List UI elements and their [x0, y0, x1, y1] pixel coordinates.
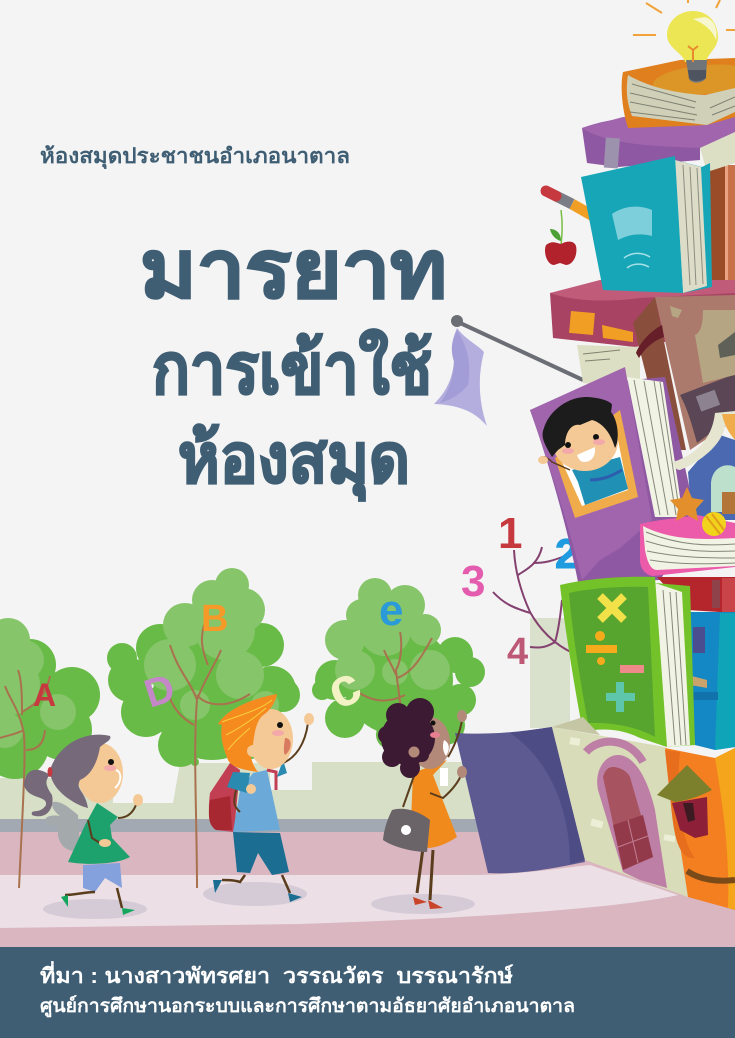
orange book with pages — [622, 58, 735, 128]
subtitle: ห้องสมุดประชาชนอำเภอนาตาล — [40, 144, 350, 170]
number branches: 1 — [498, 509, 522, 558]
number branches: 3 — [461, 557, 485, 606]
red backpack — [209, 763, 240, 832]
girl with curly hair and bag — [371, 698, 475, 914]
teal book — [581, 156, 712, 293]
stacked books tower — [530, 0, 735, 910]
pink book with star and ball — [640, 487, 735, 576]
blue house book — [673, 411, 735, 520]
background buildings — [0, 618, 570, 825]
plus sign — [606, 682, 635, 712]
main title: การเข้าใช้ — [152, 328, 432, 408]
number branches: 2 — [555, 530, 578, 577]
brown side book — [705, 165, 735, 295]
tree: right with letters e and c: c — [318, 654, 370, 721]
number branches: 4 — [507, 631, 528, 673]
footer band — [0, 947, 735, 1038]
purple book with boy — [530, 367, 700, 582]
minus sign — [620, 665, 644, 673]
tree: middle with letters B and D — [107, 568, 300, 888]
orange house wing — [657, 748, 735, 910]
source line: ที่มา : นางสาวพัทรศยา วรรณวัตร บรรณารักษ์ — [40, 960, 514, 988]
bunny backpack — [45, 802, 80, 851]
boy in frame — [538, 397, 628, 505]
multiply sign — [600, 596, 624, 620]
maroon book — [550, 280, 735, 390]
green math book — [560, 577, 695, 747]
red book — [657, 577, 735, 613]
road and pavement — [0, 819, 735, 948]
tree: right with letters e and c — [312, 578, 485, 749]
purple book — [582, 113, 735, 172]
main title — [140, 225, 447, 501]
dark box — [680, 375, 735, 443]
icon: light bulb — [633, 0, 735, 83]
divide sign — [586, 631, 617, 665]
flag — [434, 315, 583, 426]
cream house — [552, 717, 688, 897]
boy picture frame — [555, 410, 638, 518]
brown book big — [633, 295, 735, 450]
tree: left with letter A: A — [33, 677, 56, 713]
boy with red backpack — [203, 694, 314, 906]
icon: apple — [545, 210, 576, 265]
main title: มารยาท — [140, 225, 447, 314]
tree: middle with letters B and D: B — [201, 598, 228, 640]
window with hat roof — [672, 797, 708, 838]
organization line: ศูนย์การศึกษานอกระบบและการศึกษาตามอัธยาศัยอำเภอนาตาล — [40, 995, 575, 1018]
tree: middle with letters B and D: D — [139, 666, 180, 717]
main title: ห้องสมุด — [178, 421, 410, 501]
blue book — [687, 612, 735, 750]
girl in green dress — [24, 735, 147, 919]
tree: left with letter A — [0, 618, 100, 888]
purple tarp — [455, 727, 585, 873]
pencil — [546, 191, 600, 220]
number branches — [461, 509, 578, 673]
tree: right with letters e and c: e — [379, 586, 403, 635]
